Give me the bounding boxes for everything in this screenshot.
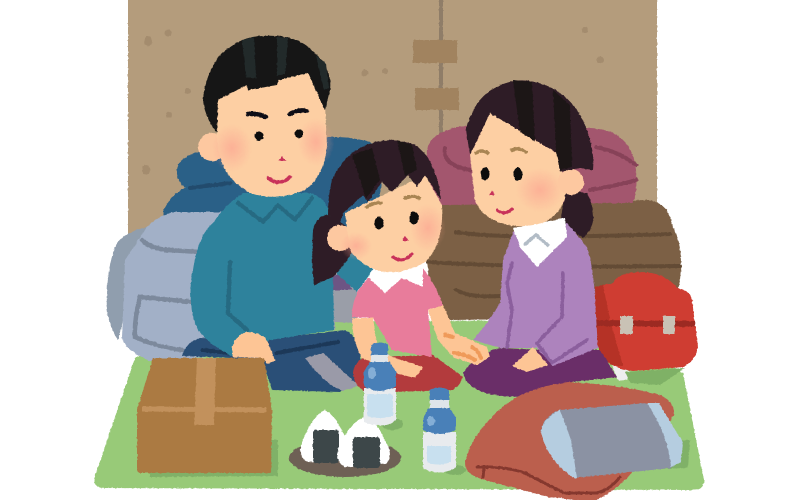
woman: [463, 80, 617, 397]
shadow under blanket: [620, 440, 690, 470]
red bag: [593, 272, 698, 371]
man's collar: [238, 198, 312, 222]
man: [182, 36, 373, 392]
woman's bun: [560, 190, 593, 238]
woman's face: [470, 113, 566, 226]
man's hand: [232, 332, 275, 364]
rice balls on plate: [289, 410, 401, 477]
girl's dress: [352, 268, 443, 357]
food held in hands: [445, 335, 481, 360]
woman's ear: [558, 169, 584, 195]
woman's collar: [513, 218, 567, 267]
bedding stack: [427, 126, 681, 320]
woman's sweater: [473, 223, 598, 366]
girl's arms and hands: [352, 318, 423, 378]
girl's face: [345, 175, 442, 272]
brown futons: [427, 200, 681, 320]
girl's ear: [327, 225, 353, 251]
grey backpack: [107, 212, 235, 361]
red-brown blanket: [465, 382, 674, 500]
shadow under red bag: [625, 368, 685, 385]
cardboard box: [137, 358, 278, 477]
rolled grey mat: [541, 403, 683, 478]
woman's skirt: [463, 348, 617, 397]
blue duffel bag: [163, 137, 385, 240]
plate: [289, 439, 401, 477]
water bottle back: [364, 342, 403, 430]
girl: [312, 140, 490, 394]
girl's hair: [328, 140, 441, 225]
man's face: [216, 68, 327, 197]
woman's hair: [466, 80, 593, 172]
woman's eyes, brows, nose and mouth: [476, 149, 526, 213]
cardboard wall: [128, 0, 657, 235]
man's hair: [203, 36, 330, 133]
green floor mat: [94, 320, 704, 490]
girl's ponytail: [312, 214, 352, 285]
man's eyes, brows, nose and mouth: [248, 110, 307, 182]
water bottle front: [423, 388, 466, 475]
rice ball right: [337, 417, 390, 467]
man's ear: [198, 133, 226, 161]
girl's collar: [368, 268, 423, 293]
rice ball left: [300, 410, 347, 463]
woman's hand on lap: [512, 347, 548, 372]
items behind girl: [333, 270, 360, 335]
girl's skirt: [353, 355, 463, 394]
girl's eyes, brows, nose and mouth: [367, 196, 419, 260]
red-purple futon: [427, 126, 636, 205]
man's trousers: [182, 330, 361, 392]
woman's foot: [610, 360, 632, 380]
man's sweater: [190, 193, 373, 356]
